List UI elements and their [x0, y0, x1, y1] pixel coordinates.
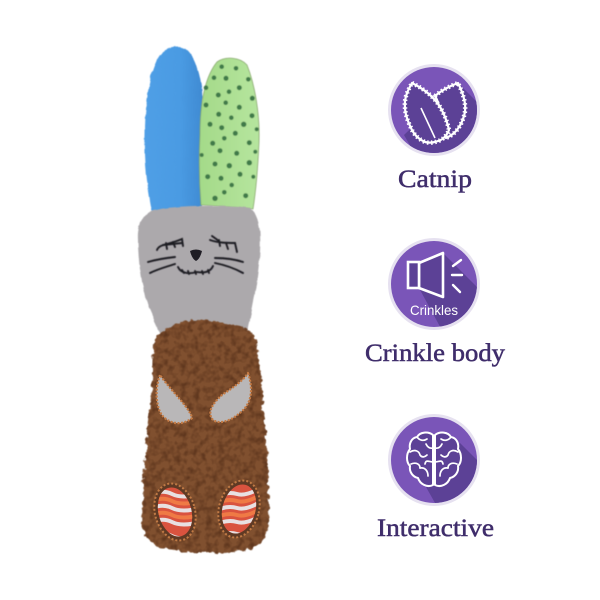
toy: plush bunny [138, 47, 269, 553]
feature: interactive [377, 414, 499, 542]
left foot pad [153, 482, 197, 542]
label: Catnip: Catnip [398, 166, 472, 193]
label: Interactive: Interactive [377, 515, 494, 542]
front leaf [405, 83, 449, 143]
feature: catnip [388, 64, 480, 193]
icon: speaker badge: Crinkles [410, 302, 458, 318]
brown furry body [142, 320, 269, 553]
icon: speaker badge [388, 238, 480, 330]
right foot pad [217, 480, 261, 538]
gray right arm patch [210, 373, 251, 422]
green polka-dot ear [199, 58, 259, 209]
label: Crinkle body: Crinkle body [365, 340, 506, 367]
icon: mint leaves badge [388, 64, 480, 156]
icon: brain badge [388, 414, 480, 506]
feature: crinkle body [365, 238, 506, 367]
gray head [138, 206, 260, 335]
nose [190, 250, 202, 261]
infographic canvas [137, 46, 506, 555]
face stitching [148, 236, 243, 274]
back leaf [435, 83, 465, 138]
blue ear [145, 47, 203, 212]
gray left arm patch [157, 375, 192, 423]
